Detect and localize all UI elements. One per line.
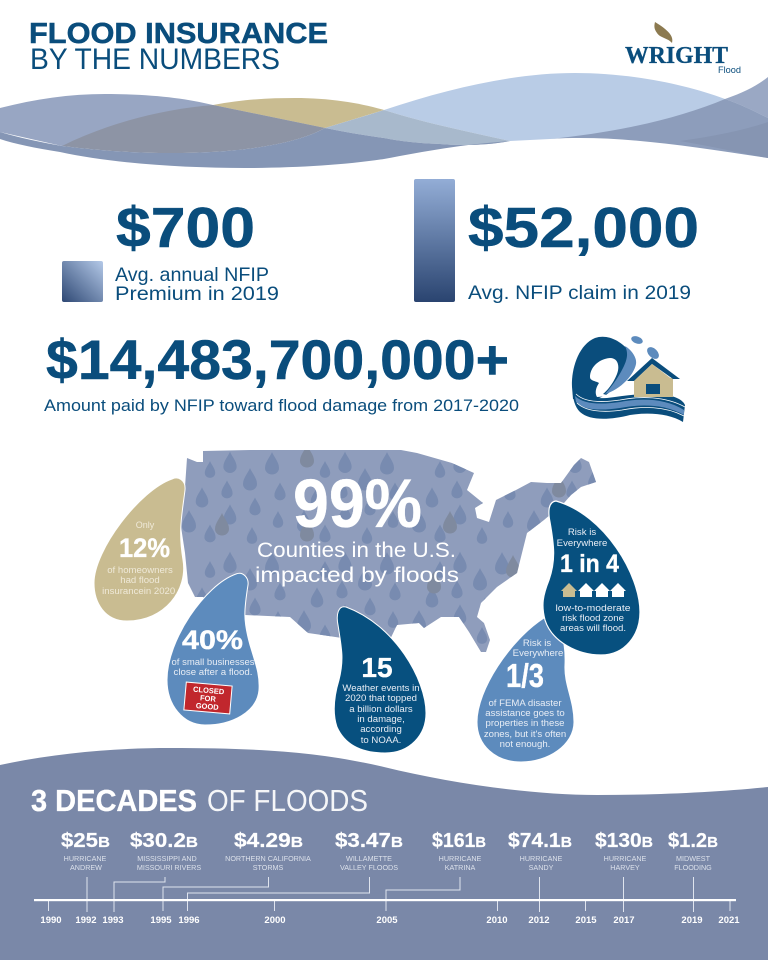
drop: 12% homeowners: 12% <box>119 533 170 563</box>
cost amounts <box>61 830 718 852</box>
stat: $700: Premium in 2019 <box>115 283 279 305</box>
drop: 15 weather events <box>334 607 426 753</box>
stat: $52,000 <box>414 179 699 304</box>
event names: NORTHERN CALIFORNIA <box>225 854 311 863</box>
event names: SANDY <box>529 863 554 872</box>
timeline years: 2012 <box>528 915 550 926</box>
timeline years: 2017 <box>613 915 635 926</box>
drop: 15 weather events: in damage, <box>357 714 405 725</box>
drop: 1 in 4: low-to-moderate <box>556 603 630 614</box>
heading <box>31 783 368 818</box>
timeline years: 2015 <box>575 915 597 926</box>
event names: ANDREW <box>70 863 102 872</box>
cost amounts: $74.1B <box>508 830 572 852</box>
event names: WILLAMETTE <box>346 854 392 863</box>
drop: 1 in 4: Risk is <box>568 527 596 538</box>
timeline years: 2000 <box>264 915 286 926</box>
drop: 1/3 FEMA assistance: properties in these <box>486 718 564 729</box>
timeline years: 2021 <box>718 915 740 926</box>
panel: 3 decades of floods <box>0 748 768 960</box>
caption: Avg. NFIP claim in 2019 <box>468 282 691 304</box>
drop: 1 in 4: risk flood zone <box>562 613 624 624</box>
sign: closed for good: CLOSED <box>193 685 225 696</box>
drop: 40% small businesses: 40% <box>182 625 243 655</box>
title <box>29 18 328 76</box>
cost amounts: $1.2B <box>668 830 718 852</box>
drop: 1/3 FEMA assistance: Risk is <box>523 638 551 649</box>
drop: 12% homeowners: insurancein 2020. <box>102 586 178 597</box>
event names: MIDWEST <box>676 854 711 863</box>
event names: FLOODING <box>674 863 712 872</box>
timeline years: 2019 <box>681 915 703 926</box>
icon: four houses <box>561 583 626 597</box>
sign: closed for good: FOR <box>200 693 217 704</box>
timeline years: 2010 <box>486 915 508 926</box>
cost amounts: $161B <box>432 830 486 852</box>
drop: 1 in 4: areas will flood. <box>560 623 626 634</box>
caption: Avg. annual NFIP <box>115 264 269 286</box>
headline: 99% counties: 99% <box>293 465 422 542</box>
drop: 1/3 FEMA assistance: assistance goes to <box>485 708 565 719</box>
cost amounts: $4.29 B <box>234 830 303 852</box>
timeline years: 1993 <box>102 915 124 926</box>
timeline years: 1990 <box>40 915 62 926</box>
logo: Wright Flood <box>625 22 741 76</box>
drop: 12% homeowners <box>94 478 185 621</box>
drop: 1/3 FEMA assistance: not enough. <box>500 739 550 750</box>
drop: 1/3 FEMA assistance: Everywhere <box>513 648 563 659</box>
value: $700 <box>116 196 255 260</box>
logo: Wright Flood: Flood <box>718 65 741 76</box>
stat: total paid: $14,483,700,000+ <box>46 328 509 391</box>
drop: 1/3 FEMA assistance: zones, but it's often <box>484 729 566 740</box>
timeline years: 1995 <box>150 915 172 926</box>
event names <box>64 854 712 872</box>
heading: OF FLOODS <box>207 783 368 818</box>
drop: 1/3 FEMA assistance <box>477 618 574 762</box>
drop: 1 in 4: Everywhere <box>557 538 607 549</box>
cost amounts: $3.47 B <box>335 830 403 852</box>
drop: 12% homeowners: had flood <box>120 575 160 586</box>
headline: 99% counties <box>255 465 459 587</box>
drop: 15 weather events: according <box>360 724 402 735</box>
cost amounts: $130B <box>595 830 653 852</box>
event names: MISSISSIPPI AND <box>137 854 197 863</box>
stat: total paid: Amount paid by NFIP toward flood damage from 2017-2020 <box>44 396 519 415</box>
drop: 15 weather events: 2020 that topped <box>345 693 417 704</box>
drop: 1/3 FEMA assistance: 1/3 <box>506 657 544 694</box>
event names: HURRICANE <box>604 854 647 863</box>
sign: closed for good <box>184 682 232 714</box>
drop: 15 weather events: Weather events in <box>342 683 420 694</box>
drop: 40% small businesses: of small businesses <box>172 657 255 668</box>
header waves <box>0 73 768 168</box>
stat: $700 <box>62 196 279 305</box>
event names: KATRINA <box>445 863 476 872</box>
event names: HURRICANE <box>439 854 482 863</box>
timeline years: 2005 <box>376 915 398 926</box>
timeline connectors <box>48 877 730 912</box>
drop: 15 weather events: a billion dollars <box>349 704 413 715</box>
cost amounts: $25B <box>61 830 110 852</box>
timeline years <box>40 915 740 926</box>
drop: 15 weather events: 15 <box>361 652 393 683</box>
event names: HARVEY <box>610 863 640 872</box>
stat: total paid <box>44 328 519 415</box>
event names: STORMS <box>253 863 284 872</box>
heading: 3 DECADES <box>31 783 197 818</box>
drop: 1 in 4 <box>543 501 640 655</box>
timeline axis <box>34 899 736 901</box>
drop: 12% homeowners: of homeowners <box>107 565 173 576</box>
title: BY THE NUMBERS <box>30 43 280 76</box>
gradient bar <box>414 179 455 302</box>
timeline years: 1992 <box>75 915 97 926</box>
drop: 40% small businesses <box>167 573 259 725</box>
value: $52,000 <box>468 196 699 260</box>
drop: 1/3 FEMA assistance: of FEMA disaster <box>488 698 562 709</box>
cost amounts: $30.2 B <box>130 830 198 852</box>
gradient square <box>62 261 103 302</box>
drop: 40% small businesses: close after a flood. <box>174 667 252 678</box>
drop: 1 in 4: 1 in 4 <box>560 550 619 578</box>
map: United States with rain pattern <box>181 450 596 652</box>
title: FLOOD INSURANCE <box>29 18 328 50</box>
headline: 99% counties: Counties in the U.S. <box>257 538 456 562</box>
event names: HURRICANE <box>520 854 563 863</box>
icon: wave and house <box>572 335 685 422</box>
sign: closed for good: GOOD <box>195 701 220 712</box>
headline: 99% counties: impacted by floods <box>255 563 459 587</box>
event names: MISSOURI RIVERS <box>137 863 201 872</box>
logo: Wright Flood: WRIGHT <box>625 43 728 69</box>
event names: VALLEY FLOODS <box>340 863 398 872</box>
event names: HURRICANE <box>64 854 107 863</box>
drop: 15 weather events: to NOAA. <box>361 735 401 746</box>
timeline years: 1996 <box>178 915 200 926</box>
drop: 12% homeowners: Only <box>136 520 155 530</box>
